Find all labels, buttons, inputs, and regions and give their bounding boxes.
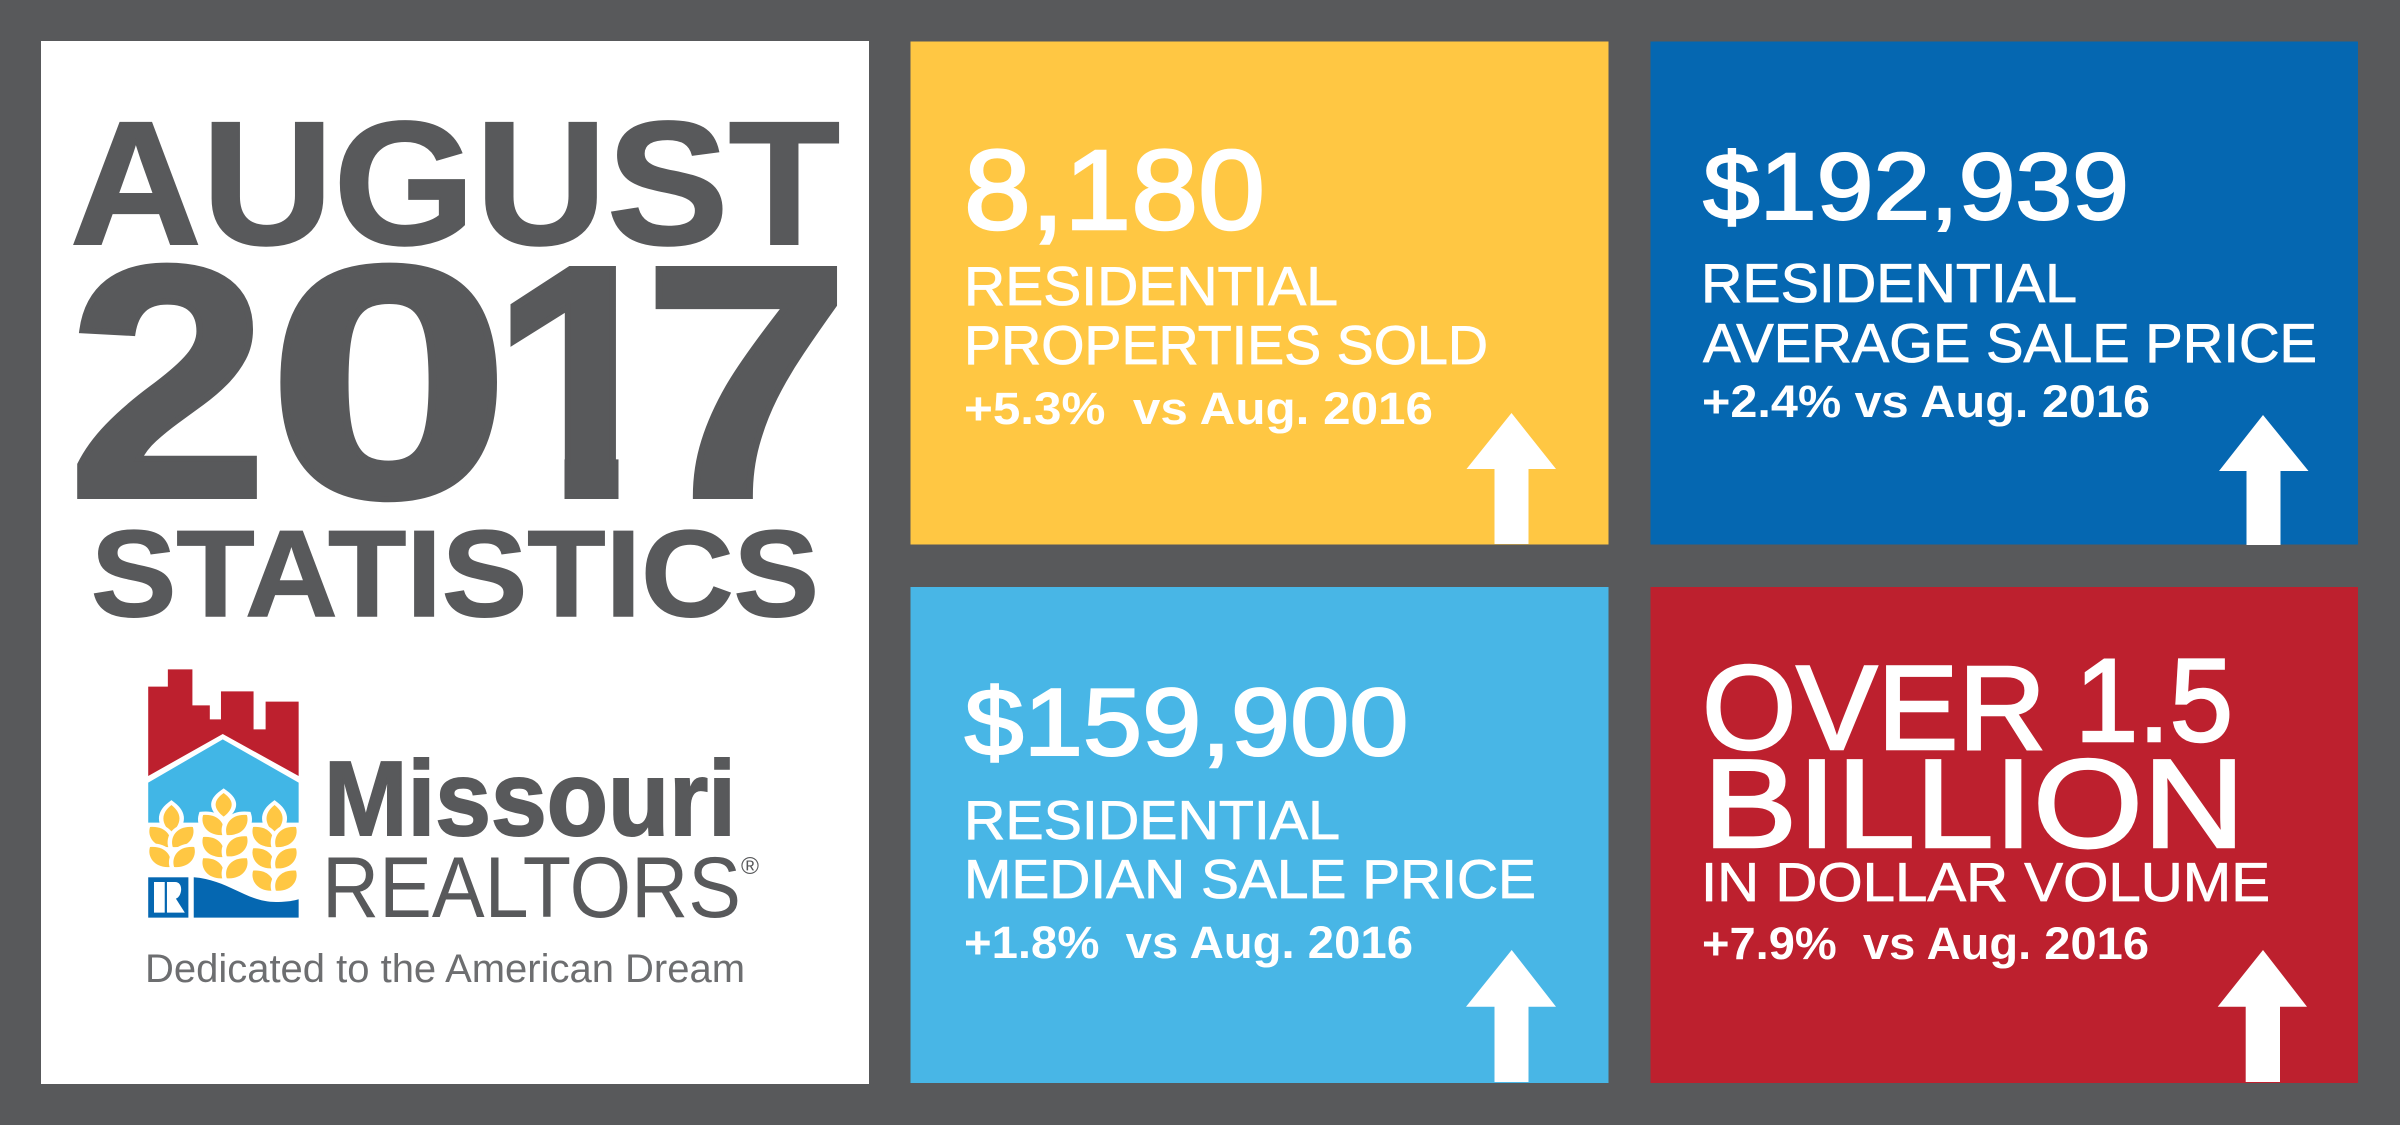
icon: up arrow bbox=[2218, 950, 2307, 1082]
heading: 2017: 2 bbox=[68, 197, 268, 566]
heading: 2017: 1 bbox=[491, 197, 674, 566]
year-over-year change: +5.3% vs Aug. 2016 bbox=[964, 383, 1433, 434]
statistic value line one: 1.5: 1.5 bbox=[2075, 635, 2233, 767]
heading: 2017 bbox=[68, 197, 850, 566]
icon: up arrow bbox=[1466, 413, 1556, 544]
heading: Statistics: STATISTICS bbox=[91, 506, 819, 643]
label line one: RESIDENTIAL bbox=[964, 255, 1338, 317]
heading: 2017: 7 bbox=[643, 197, 850, 566]
registered mark: ® bbox=[741, 853, 759, 880]
panel: properties sold bbox=[910, 42, 1608, 544]
label line two: MEDIAN SALE PRICE bbox=[964, 848, 1536, 910]
logo: Missouri Realtors bbox=[145, 669, 759, 991]
statistic value line one: over: OVER bbox=[1702, 641, 2046, 775]
panel: average sale price bbox=[1650, 42, 2358, 545]
heading: August: AUGUST bbox=[70, 86, 840, 282]
statistic value: $159,900 bbox=[964, 669, 1408, 776]
panel: title and logo bbox=[41, 41, 869, 1084]
label line one: RESIDENTIAL bbox=[1701, 252, 2077, 314]
icon: up arrow bbox=[2219, 415, 2308, 545]
statistic value: $192,939 bbox=[1703, 134, 2129, 240]
panel: median sale price bbox=[910, 587, 1608, 1083]
label: IN DOLLAR VOLUME bbox=[1701, 851, 2270, 913]
tagline: Dedicated to the American Dream bbox=[145, 947, 745, 991]
label line two: PROPERTIES SOLD bbox=[964, 314, 1488, 376]
icon: up arrow bbox=[1466, 950, 1556, 1082]
label line one: RESIDENTIAL bbox=[964, 789, 1340, 851]
heading: 2017: 0 bbox=[267, 197, 511, 566]
statistic value: 8,180 bbox=[964, 127, 1265, 253]
label line two: AVERAGE SALE PRICE bbox=[1703, 312, 2317, 374]
logo wordmark: Missouri: Missouri bbox=[324, 740, 736, 858]
year-over-year change: +1.8% vs Aug. 2016 bbox=[964, 917, 1413, 968]
year-over-year change: +7.9% vs Aug. 2016 bbox=[1702, 918, 2149, 969]
statistic value line two: billion: BILLION bbox=[1703, 733, 2245, 874]
logo wordmark: Realtors: REALTORS bbox=[322, 840, 741, 936]
year-over-year change: +2.4% vs Aug. 2016 bbox=[1702, 376, 2150, 427]
panel: dollar volume bbox=[1650, 587, 2358, 1083]
icon: house, skyline and wheat bbox=[148, 669, 299, 918]
